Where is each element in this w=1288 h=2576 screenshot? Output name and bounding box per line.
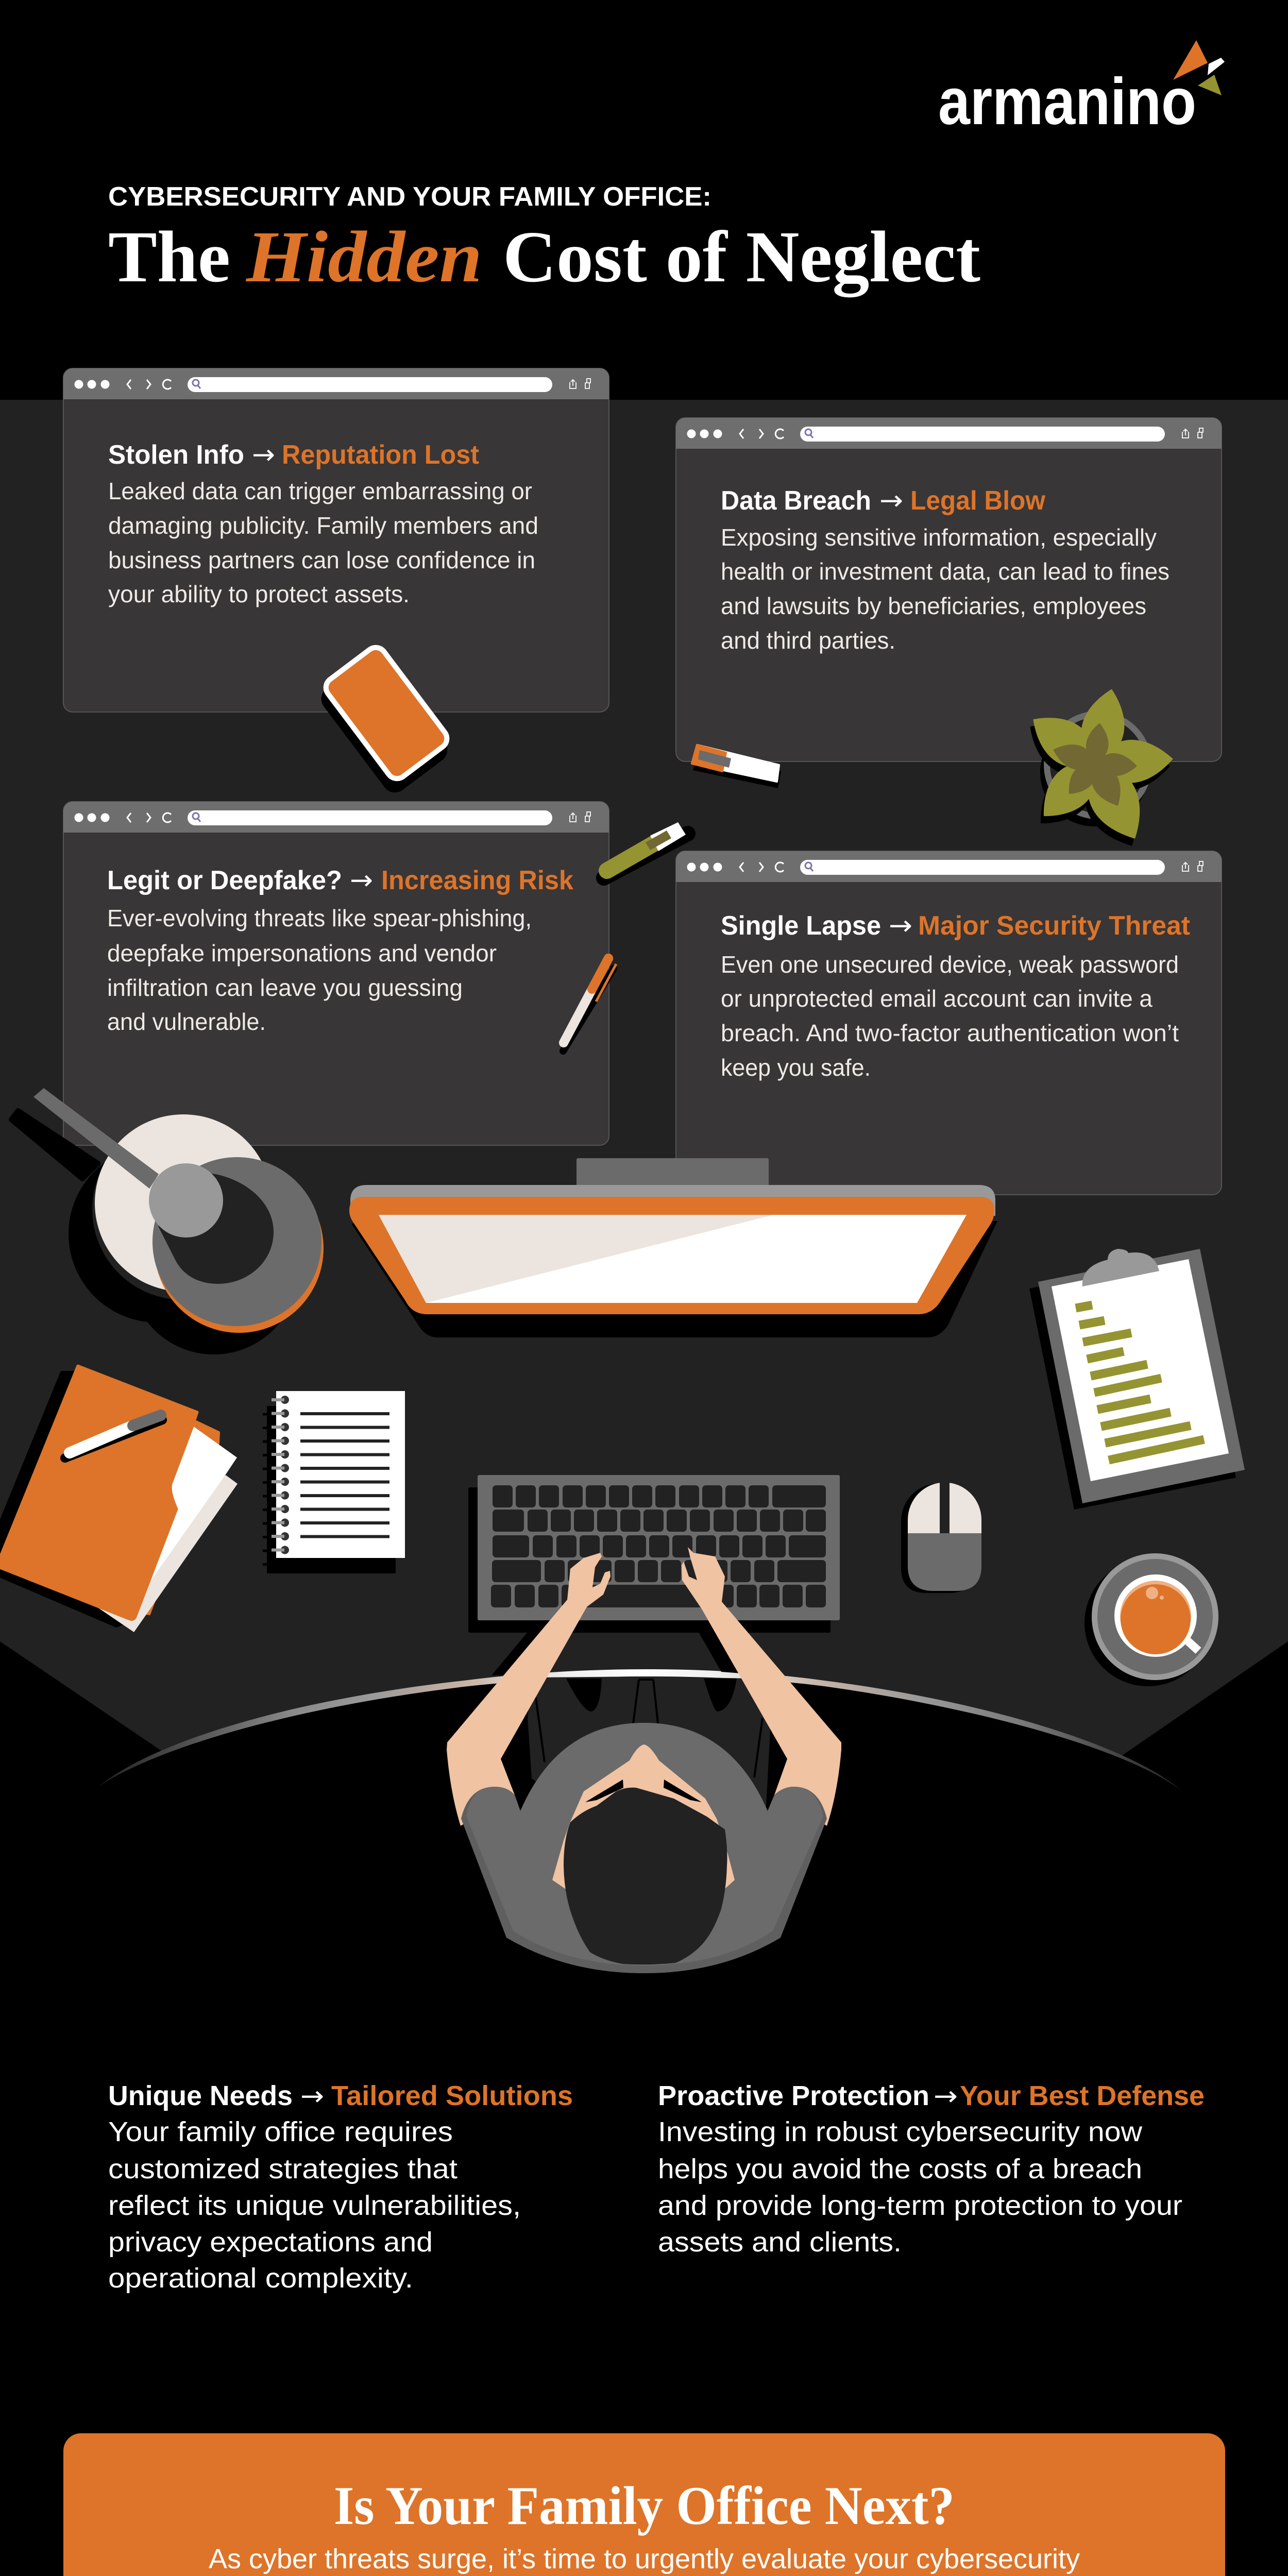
body text: Your family office requires — [108, 2116, 453, 2147]
plant inner leaves — [1049, 722, 1138, 812]
main title — [108, 216, 980, 297]
icon: folder with papers — [0, 1366, 238, 1632]
icon: coffee cup and saucer — [1084, 1553, 1218, 1686]
folder shadow — [0, 1372, 124, 1626]
heading: Data Breach — [721, 486, 871, 516]
body text: privacy expectations and — [108, 2227, 433, 2258]
heading: Reputation Lost — [282, 440, 479, 470]
heading: → — [252, 439, 275, 470]
heading — [108, 2080, 573, 2112]
browser window — [63, 802, 609, 1145]
handle shadow — [11, 1111, 98, 1179]
keys — [491, 1485, 826, 1607]
body text: deepfake impersonations and vendor — [107, 940, 497, 967]
plant leaves — [1021, 685, 1174, 850]
heading: Increasing Risk — [381, 866, 573, 895]
monitor screen — [379, 1215, 967, 1303]
folder back — [139, 1421, 219, 1614]
body text: damaging publicity. Family members and — [108, 512, 538, 539]
spoon handle — [33, 1088, 159, 1189]
body text: health or investment data, can lead to fines — [721, 558, 1170, 585]
panel: legit or deepfake — [63, 802, 609, 1145]
heading: Your Best Defense — [960, 2080, 1205, 2111]
text block: proactive protection — [658, 2080, 1205, 2258]
title block — [108, 182, 980, 297]
body text: and provide long-term protection to your — [658, 2190, 1182, 2221]
monitor shadow — [351, 1221, 997, 1337]
heading: Single Lapse — [721, 911, 881, 941]
heading — [107, 865, 573, 896]
text block: unique needs — [108, 2080, 573, 2294]
main title: Hidden — [245, 216, 482, 297]
icon: spiral notebook — [263, 1391, 405, 1573]
body text: assets and clients. — [658, 2227, 902, 2258]
icon: smartphone — [320, 643, 451, 794]
folder front — [0, 1366, 197, 1619]
right arm and hand — [682, 1547, 841, 1826]
heading: Major Security Threat — [918, 911, 1190, 941]
heading: Tailored Solutions — [331, 2080, 573, 2111]
callout heading: Is Your Family Office Next? — [334, 2476, 955, 2536]
heading — [658, 2080, 1205, 2112]
heading: → — [350, 865, 373, 896]
chair — [528, 1676, 771, 1807]
collar shadows — [585, 1780, 702, 1802]
eyebrow heading: CYBERSECURITY AND YOUR FAMILY OFFICE: — [108, 182, 711, 212]
person at desk — [447, 1547, 841, 1973]
icon: clipboard — [1029, 1249, 1245, 1510]
icon: olive marker — [604, 822, 688, 878]
plant leaves shadow — [1018, 709, 1171, 857]
body text: or unprotected email account can invite a — [721, 985, 1153, 1012]
monitor stand — [577, 1158, 769, 1194]
icon: highlighter — [692, 745, 781, 788]
body text — [721, 951, 1179, 1081]
icon: mouse — [901, 1482, 981, 1593]
heading: → — [300, 2081, 324, 2112]
body text: and vulnerable. — [107, 1008, 266, 1035]
panel: data breach — [676, 418, 1222, 761]
heading: Legal Blow — [910, 486, 1046, 516]
logo wordmark: armanino — [938, 65, 1196, 139]
body text: keep you safe. — [721, 1054, 871, 1081]
body text: infiltration can leave you guessing — [107, 974, 463, 1001]
desk surface — [0, 400, 1288, 1756]
body text: your ability to protect assets. — [108, 581, 410, 607]
body text: helps you avoid the costs of a breach — [658, 2154, 1142, 2184]
callout body: As cyber threats surge, it’s time to urgently evaluate your cybersecurity — [209, 2544, 1080, 2574]
binding ticks — [263, 1414, 268, 1564]
hair — [564, 1788, 727, 1964]
heading: Legit or Deepfake? — [107, 866, 342, 895]
heading: → — [889, 910, 912, 941]
heading — [721, 485, 1046, 516]
body text — [108, 2116, 521, 2294]
left arm and hand — [447, 1553, 611, 1826]
logo star — [1173, 40, 1225, 95]
body text: business partners can lose confidence in — [108, 547, 535, 573]
pen on folder — [65, 1415, 162, 1458]
body text: and lawsuits by beneficiaries, employees — [721, 592, 1146, 619]
main title: The — [108, 216, 230, 297]
panel: single lapse — [676, 851, 1222, 1195]
panel: stolen info — [63, 368, 609, 712]
arm shadows — [492, 1632, 748, 1675]
heading: Proactive Protection — [658, 2080, 929, 2111]
desk edge — [99, 1669, 1182, 1791]
body text — [107, 905, 532, 1035]
monitor — [349, 1158, 997, 1337]
main title: Cost of Neglect — [503, 216, 980, 297]
body text: operational complexity. — [108, 2263, 413, 2294]
heading: Stolen Info — [108, 440, 244, 470]
icon: potted plant — [1018, 685, 1174, 857]
beige paper — [94, 1475, 238, 1632]
body text: and third parties. — [721, 627, 895, 654]
body text: Investing in robust cybersecurity now — [658, 2116, 1143, 2147]
body text: breach. And two-factor authentication won’t — [721, 1020, 1179, 1046]
body text: Even one unsecured device, weak password — [721, 951, 1179, 978]
body text — [658, 2116, 1182, 2258]
neck and ears — [552, 1744, 735, 1889]
browser window — [676, 851, 1222, 1195]
notebook rings — [272, 1396, 289, 1554]
mug ring — [152, 1157, 321, 1326]
heading: Unique Needs — [108, 2080, 293, 2111]
browser window — [676, 418, 1222, 761]
shirt — [461, 1723, 827, 1973]
body text: Leaked data can trigger embarrassing or — [108, 478, 532, 504]
chart bars — [1076, 1305, 1204, 1460]
body text — [108, 478, 538, 607]
callout: is your family office next — [63, 2433, 1225, 2576]
monitor back edge — [350, 1185, 995, 1216]
notebook lines — [300, 1414, 389, 1536]
body text: Exposing sensitive information, especially — [721, 524, 1157, 551]
icon: plate and coffee mug — [11, 1088, 324, 1354]
heading: → — [879, 485, 903, 516]
heading — [721, 910, 1190, 941]
icon: orange pen — [563, 958, 616, 1051]
plate — [95, 1114, 272, 1292]
body text: customized strategies that — [108, 2154, 457, 2184]
white paper — [147, 1427, 237, 1586]
monitor frame — [349, 1197, 994, 1314]
heading — [108, 439, 479, 470]
body text — [721, 524, 1170, 654]
heading: → — [934, 2081, 958, 2112]
body text: Ever-evolving threats like spear-phishing, — [107, 905, 532, 931]
browser window — [63, 368, 609, 712]
logo: armanino — [938, 40, 1225, 139]
icon: keyboard — [468, 1475, 840, 1633]
body text: reflect its unique vulnerabilities, — [108, 2190, 521, 2221]
